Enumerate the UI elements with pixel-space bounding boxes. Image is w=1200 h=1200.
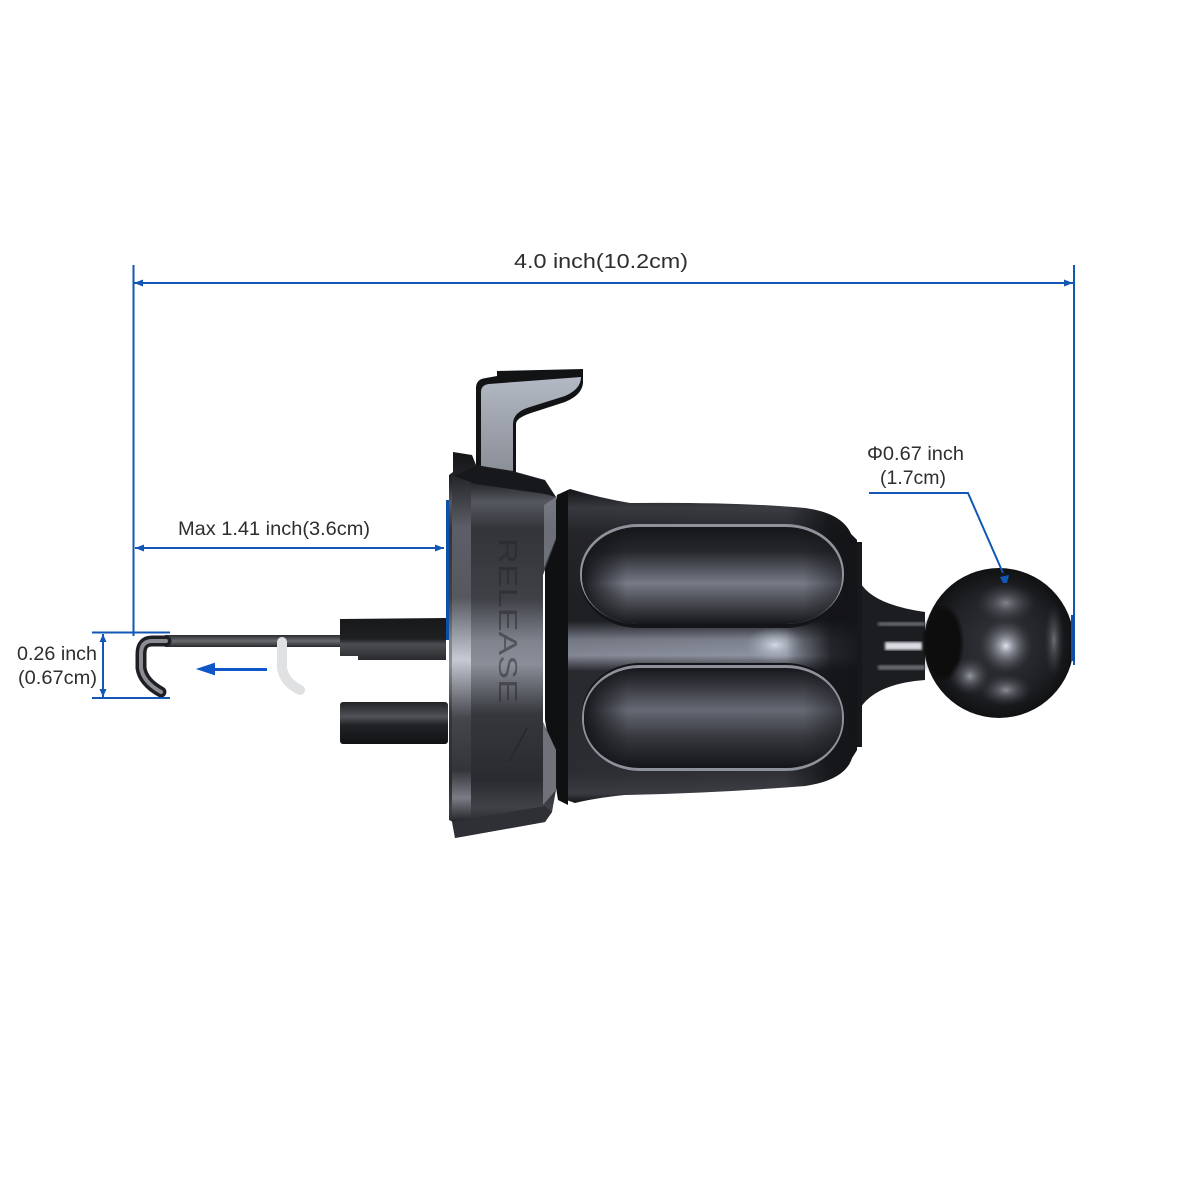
dimension: hook height 0.26 inch <box>17 632 170 698</box>
dimension: hook depth 1.41 inch: Max 1.41 inch(3.6cm) <box>178 518 370 540</box>
arrow: hook extension direction <box>199 664 266 674</box>
embossed release text: RELEASE <box>493 538 523 703</box>
infographic: vent clip dimensions <box>18 253 1075 838</box>
dimension: overall length 4.0 inch: 4.0 inch(10.2cm) <box>514 251 688 273</box>
upper prong with hook wire <box>141 618 446 692</box>
grey release clip arm <box>476 369 583 476</box>
ball neck <box>857 542 925 747</box>
ghost hook: retracted position <box>282 642 300 690</box>
dimension: ball diameter callout: (1.7cm) <box>880 467 946 489</box>
lower finger groove <box>582 663 844 771</box>
upper finger groove <box>580 524 844 628</box>
main grip body <box>545 485 860 807</box>
dimension: hook height 0.26 inch: 0.26 inch <box>17 643 97 665</box>
ball joint <box>924 568 1074 718</box>
dimension: hook height 0.26 inch: (0.67cm) <box>18 667 97 689</box>
lower prong <box>340 702 448 744</box>
tension ring with release label <box>449 452 556 838</box>
dimension: ball diameter callout <box>867 443 1073 661</box>
dimension: overall length 4.0 inch <box>134 251 1074 665</box>
dimension: hook depth 1.41 inch <box>135 500 448 640</box>
dimension: ball diameter callout: Φ0.67 inch <box>867 443 964 465</box>
